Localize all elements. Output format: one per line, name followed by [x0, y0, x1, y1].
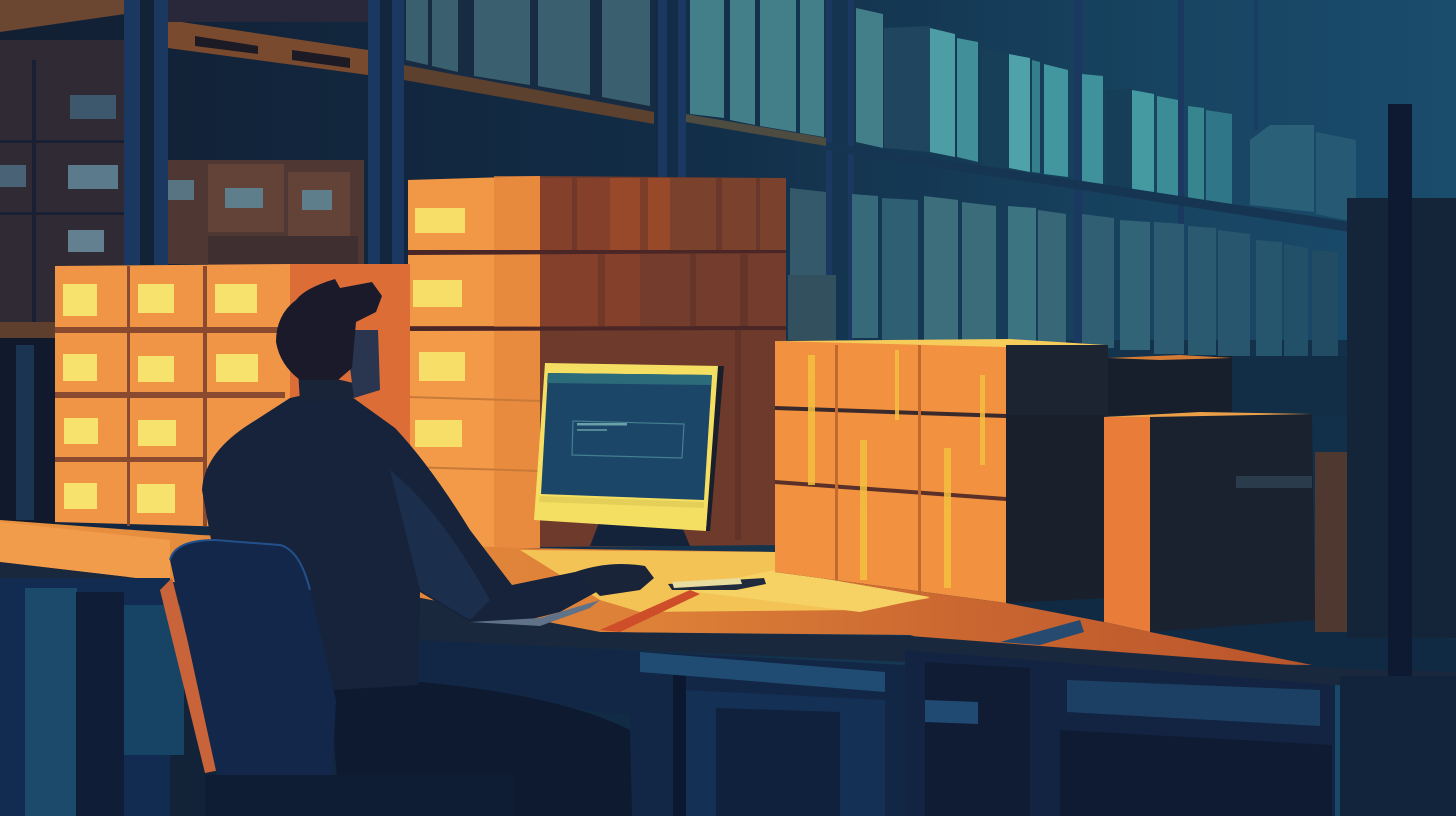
panel: far right foreground post and dark stacks	[1340, 104, 1456, 816]
panel: top shelf boxes in perspective	[404, 0, 1356, 232]
body	[202, 394, 600, 690]
panel: upper left shelf with brown cartons	[0, 0, 368, 338]
panel: lower shelf boxes in perspective	[788, 188, 1456, 416]
hand	[575, 564, 654, 596]
panel: upright steel posts	[124, 0, 1258, 355]
icon: monitor	[534, 363, 724, 546]
person: worker seen from behind	[202, 279, 654, 816]
legs	[330, 682, 632, 816]
label: carton stickers	[413, 208, 465, 447]
panel: desk	[0, 520, 1456, 688]
panel: desk underside and drawers	[0, 578, 1335, 816]
panel: left orange carton wall	[55, 264, 410, 530]
panel: left lower shelf	[0, 338, 55, 528]
panel: right stacked crate	[775, 339, 1108, 603]
decoration: yellow drip streaks	[808, 350, 985, 588]
panel: tall carton stack behind monitor	[408, 176, 786, 548]
neck and face	[298, 370, 362, 402]
icon: keyboard, paper and pen	[668, 578, 766, 590]
hair	[276, 279, 382, 380]
chair	[160, 540, 515, 816]
label: wall stickers	[63, 284, 258, 513]
panel: right dark cartons	[1104, 355, 1355, 632]
